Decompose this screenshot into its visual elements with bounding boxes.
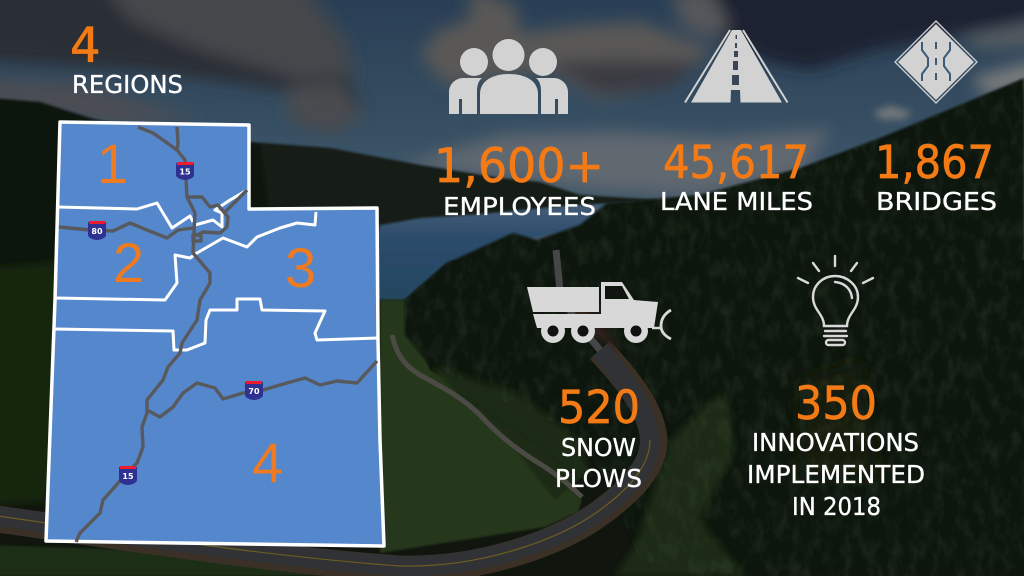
- shield: I-80: [88, 221, 106, 240]
- region number 3: 3: [285, 236, 316, 299]
- stat: regions: 4: [70, 18, 101, 74]
- stat: bridges: BRIDGES: [876, 187, 997, 216]
- region number 4: 4: [252, 431, 283, 494]
- stat: employees: 1,600+: [434, 139, 604, 194]
- stat: lane miles: 45,617: [663, 136, 809, 189]
- icon: light bulb: [798, 256, 873, 345]
- stat: lane miles: LANE MILES: [660, 187, 813, 216]
- stat: lane miles: [660, 136, 813, 216]
- shield: I-80: 80: [91, 227, 103, 236]
- stat: innovations: IMPLEMENTED: [747, 460, 925, 489]
- stat: innovations: [747, 377, 925, 521]
- shield: I-15 south: 15: [122, 472, 134, 481]
- forest texture: [405, 98, 1024, 576]
- stat: regions: REGIONS: [72, 70, 183, 99]
- stat: bridges: [875, 136, 997, 216]
- stat: innovations: IN 2018: [792, 492, 881, 521]
- stat: employees: EMPLOYEES: [443, 192, 596, 221]
- icon: snow plow truck: [527, 282, 671, 343]
- stat: innovations: INNOVATIONS: [752, 428, 919, 457]
- stat: snow plows: SNOW: [561, 433, 636, 462]
- region number 1: 1: [97, 132, 128, 195]
- icon: people: [449, 39, 568, 114]
- far hills: [250, 142, 660, 290]
- region boundaries: [55, 190, 378, 350]
- stat: snow plows: 520: [558, 381, 640, 434]
- stat: snow plows: PLOWS: [555, 464, 642, 493]
- shield: I-15 north: 15: [179, 168, 191, 176]
- icon: highway: [685, 30, 788, 102]
- stat: innovations: 350: [795, 377, 877, 430]
- stat: snow plows: [555, 381, 642, 493]
- map: Utah regions: [46, 122, 384, 546]
- highways: [59, 127, 377, 542]
- stat: bridges: 1,867: [875, 136, 994, 189]
- left hill: [0, 98, 280, 300]
- meadows: [0, 262, 70, 505]
- shield: I-70: 70: [248, 387, 260, 396]
- road shoulder: [0, 350, 654, 569]
- right forest: [405, 78, 1024, 576]
- state shape: [46, 122, 384, 546]
- stat: regions: [70, 18, 183, 99]
- shield: I-15 north: [176, 162, 194, 180]
- stat: employees: [434, 139, 604, 221]
- icon: bridge sign: [895, 21, 977, 103]
- lake: [360, 198, 660, 300]
- shield: I-15 south: [119, 466, 137, 485]
- road: [0, 250, 650, 566]
- shield: I-70: [245, 381, 263, 400]
- region number 2: 2: [113, 231, 144, 294]
